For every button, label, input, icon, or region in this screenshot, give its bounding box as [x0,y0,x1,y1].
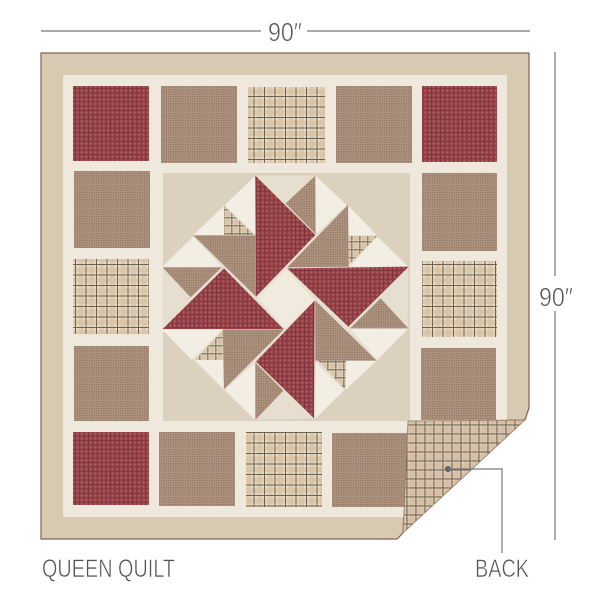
left column blocks [73,171,150,421]
top row blocks [73,86,497,163]
bottom row blocks [73,432,408,507]
folded corner showing back fabric [403,420,525,533]
lattice sashing [63,75,507,517]
label: queen quilt: QUEEN QUILT [42,555,175,583]
quilt [41,53,529,539]
label: back: BACK [475,555,529,583]
centre panel background [163,173,410,421]
right column blocks [421,173,497,420]
width dimension: 90 inches: 90″ [268,17,302,47]
star medallion [163,176,409,420]
callout leader: back fabric [445,466,502,553]
height dimension: 90 inches: 90″ [539,282,573,312]
outer border [41,53,529,539]
